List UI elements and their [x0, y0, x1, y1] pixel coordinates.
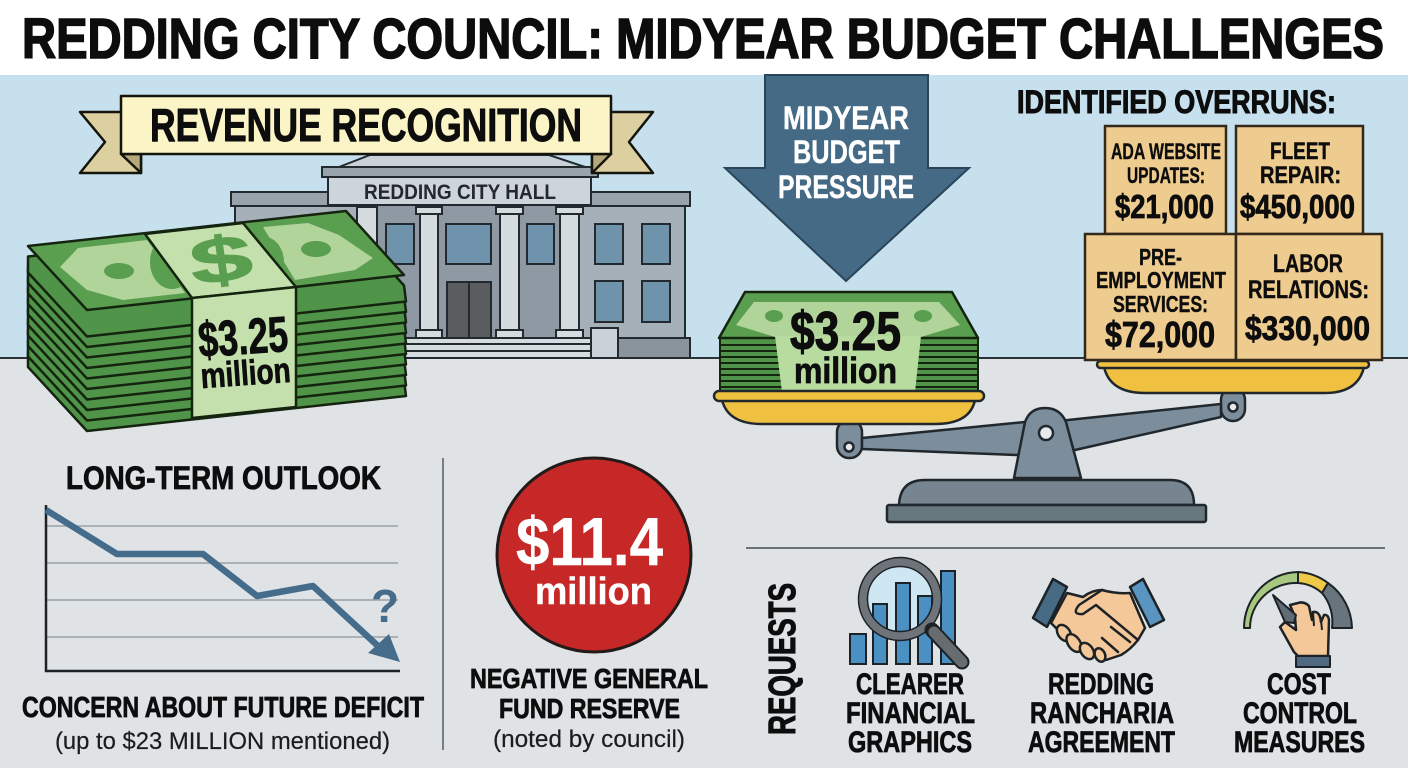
text: future deficit concern: CONCERN ABOUT FUTURE DEFICIT: [22, 692, 424, 724]
left pan with money stack: [714, 292, 984, 424]
text: negative general fund reserve: (noted by council): [493, 726, 685, 753]
text: negative general fund reserve: [470, 663, 708, 753]
request text: cost control measures: MEASURES: [1234, 726, 1365, 759]
icon: handshake: [1033, 579, 1164, 663]
box: pre-employment services: PRE-: [1139, 244, 1182, 270]
box: fleet repair: $450,000: [1240, 188, 1355, 225]
icon: gauge with hand: [1244, 572, 1352, 667]
request text: redding rancharia agreement: AGREEMENT: [1028, 726, 1175, 759]
arrow: midyear budget pressure: PRESSURE: [778, 169, 914, 205]
box: fleet repair: [1236, 126, 1363, 234]
arrow: midyear budget pressure: BUDGET: [793, 134, 900, 170]
box: ADA website updates: [1105, 126, 1226, 234]
box: labor relations: [1236, 234, 1382, 360]
left pan with money stack: million: [794, 350, 897, 391]
heading: identified overruns: IDENTIFIED OVERRUNS:: [1017, 84, 1336, 120]
building name: REDDING CITY HALL: [364, 181, 556, 204]
request text: redding rancharia agreement: [1028, 668, 1175, 759]
box: pre-employment services: EMPLOYMENT: [1096, 267, 1226, 293]
text: negative general fund reserve: NEGATIVE GENERAL: [470, 663, 708, 694]
box: labor relations: LABOR: [1273, 250, 1343, 278]
arrow: midyear budget pressure: MIDYEAR: [783, 100, 909, 136]
arrow: midyear budget pressure: [725, 75, 969, 281]
request text: cost control measures: COST: [1267, 668, 1331, 701]
box: pre-employment services: $72,000: [1105, 314, 1215, 355]
scale: beam, fulcrum and base: [837, 388, 1245, 522]
text: future deficit concern: [22, 692, 424, 755]
request text: clearer financial graphics: FINANCIAL: [846, 697, 975, 730]
box: fleet repair: REPAIR:: [1260, 162, 1341, 189]
box: ADA website updates: ADA WEBSITE: [1111, 139, 1221, 164]
text: negative general fund reserve: FUND RESERVE: [499, 693, 680, 724]
box: ADA website updates: $21,000: [1115, 188, 1214, 225]
illustration: Redding City Hall: [231, 155, 690, 358]
red circle: $11.4 million: [497, 458, 691, 652]
request text: clearer financial graphics: GRAPHICS: [848, 726, 972, 759]
banner: revenue recognition: [80, 96, 653, 173]
line chart: declining outlook: ?: [371, 580, 399, 632]
box: labor relations: $330,000: [1245, 310, 1370, 348]
request text: cost control measures: [1234, 668, 1365, 759]
heading: long-term outlook: LONG-TERM OUTLOOK: [66, 460, 381, 496]
request text: redding rancharia agreement: REDDING: [1048, 668, 1154, 701]
request text: cost control measures: CONTROL: [1243, 697, 1357, 730]
stack amount: million: [199, 351, 292, 396]
line chart: declining outlook: [46, 505, 400, 671]
right pan with overrun boxes: [1085, 126, 1382, 393]
banner text: REVENUE RECOGNITION: [150, 99, 582, 151]
illustration: large money stack $3.25 million: [28, 211, 406, 431]
box: pre-employment services: SERVICES:: [1113, 291, 1208, 317]
request text: redding rancharia agreement: RANCHARIA: [1030, 697, 1174, 730]
red circle: $11.4 million: million: [535, 571, 652, 613]
box: fleet repair: FLEET: [1270, 138, 1330, 165]
heading: requests: REQUESTS: [762, 583, 804, 735]
icon: bar chart with magnifying glass: [850, 558, 962, 664]
box: ADA website updates: UPDATES:: [1127, 163, 1205, 188]
red circle: $11.4 million: $11.4: [516, 504, 663, 580]
box: pre-employment services: [1085, 234, 1236, 360]
stack amount: $3.25: [196, 306, 290, 368]
request text: clearer financial graphics: CLEARER: [856, 668, 964, 701]
dollar sign on band: $: [185, 220, 257, 300]
stack amount: [196, 306, 292, 396]
request text: clearer financial graphics: [846, 668, 975, 759]
left pan amount: $3.25: [790, 300, 901, 362]
box: labor relations: RELATIONS:: [1248, 276, 1369, 304]
text: future deficit concern: (up to $23 MILLION mentioned): [55, 728, 390, 755]
